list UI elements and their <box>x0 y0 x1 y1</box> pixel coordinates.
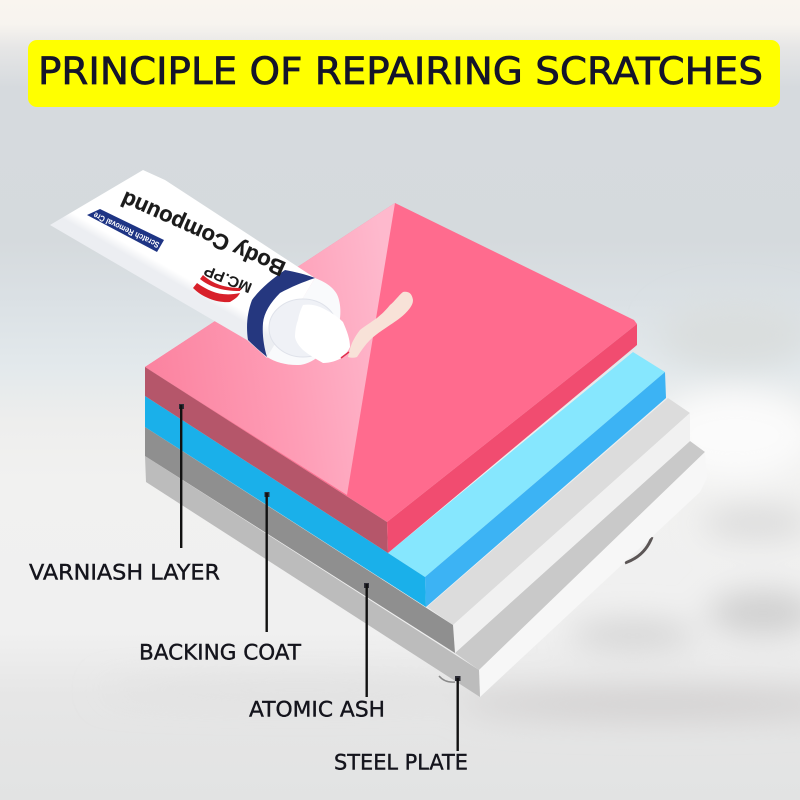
callout: backing coat <box>139 492 302 666</box>
steel plate layer <box>145 441 707 697</box>
logo text: MC.PP <box>202 262 254 296</box>
callout: atomic ash: ATOMIC ASH <box>249 698 385 722</box>
blue label: Scratch Removal Cre <box>91 210 161 250</box>
callout: steel plate: STEEL PLATE <box>334 750 468 776</box>
layered panel stack <box>145 203 707 697</box>
shoulder <box>267 278 340 365</box>
backing coat layer <box>145 352 666 607</box>
nozzle tip mark <box>341 352 349 358</box>
title: PRINCIPLE OF REPAIRING SCRATCHES <box>38 50 763 93</box>
callout: atomic ash <box>249 583 385 722</box>
nozzle <box>295 305 350 363</box>
paste <box>348 292 413 358</box>
logo swoosh <box>193 275 241 302</box>
callout: varnish layer: VARNIASH LAYER <box>29 560 220 586</box>
title banner <box>28 40 780 107</box>
atomic ash layer <box>145 398 690 653</box>
brand text: Body Compound <box>117 186 289 281</box>
callout: steel plate <box>334 676 468 776</box>
callout: backing coat: BACKING COAT <box>139 640 302 666</box>
shoulder ring <box>269 299 337 357</box>
screw shadows <box>439 537 652 682</box>
callout: varnish layer <box>29 404 220 586</box>
varnish layer <box>145 203 637 553</box>
icon: repair compound tube <box>50 170 350 365</box>
blue band <box>247 270 315 357</box>
tube body <box>50 170 315 358</box>
